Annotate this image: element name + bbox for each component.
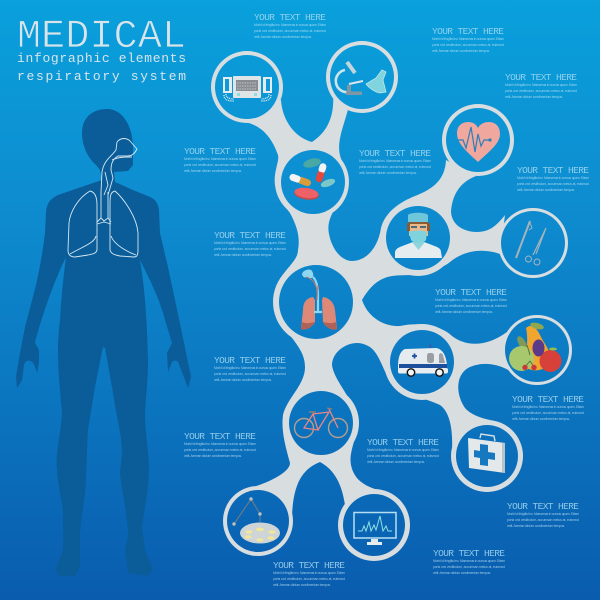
text block 4	[184, 146, 256, 173]
text block 5: velit. Aenean dictum condimentum tempus.	[359, 171, 417, 175]
text block 3: porta orci vestibulum, accumsan metus at, euismod	[505, 89, 577, 93]
lung and airway outlines	[68, 138, 138, 257]
human body silhouette with respiratory system	[16, 109, 191, 576]
text block 9: Morbi id fringilla leo. Maecenas in cursus quam. Etiam	[214, 366, 286, 370]
text block 8: velit. Aenean dictum condimentum tempus.	[435, 310, 493, 314]
text block 10	[512, 394, 584, 421]
text block 9: velit. Aenean dictum condimentum tempus.	[214, 378, 272, 382]
node inner discs	[215, 45, 569, 556]
text block 13	[507, 501, 579, 528]
subtitle: infographic elements: infographic elements	[17, 51, 186, 66]
text block 13: velit. Aenean dictum condimentum tempus.	[507, 524, 565, 528]
heading: MEDICAL: MEDICAL	[17, 15, 186, 60]
text block 8	[435, 287, 507, 314]
text block 11: Morbi id fringilla leo. Maecenas in cursus quam. Etiam	[184, 442, 256, 446]
text block 12	[367, 437, 439, 464]
text block 15: YOUR TEXT HERE	[433, 548, 505, 559]
text block 11: porta orci vestibulum, accumsan metus at, euismod	[184, 448, 256, 452]
text block 15	[433, 548, 505, 575]
text block 11: velit. Aenean dictum condimentum tempus.	[184, 454, 242, 458]
text block 4: velit. Aenean dictum condimentum tempus.	[184, 169, 242, 173]
icon: ambulance	[398, 344, 448, 376]
text block 10: Morbi id fringilla leo. Maecenas in cursus quam. Etiam	[512, 405, 584, 409]
text block 6: YOUR TEXT HERE	[517, 165, 589, 176]
text block 12: velit. Aenean dictum condimentum tempus.	[367, 460, 425, 464]
text block 7: YOUR TEXT HERE	[214, 230, 286, 241]
text block 6	[517, 165, 589, 192]
icon: microscope and flask	[336, 62, 386, 95]
text block 14: velit. Aenean dictum condimentum tempus.	[273, 583, 331, 587]
text block 7: Morbi id fringilla leo. Maecenas in cursus quam. Etiam	[214, 241, 286, 245]
text block 3: YOUR TEXT HERE	[505, 72, 577, 83]
text block 7: velit. Aenean dictum condimentum tempus.	[214, 253, 272, 257]
subtitle: respiratory system: respiratory system	[17, 69, 186, 84]
icon: lungs	[301, 270, 337, 330]
text block 14	[273, 560, 345, 587]
icon: heart with ECG	[457, 122, 500, 162]
icon: first aid kit	[468, 434, 505, 473]
text block 13: porta orci vestibulum, accumsan metus at, euismod	[507, 518, 579, 522]
body silhouette	[16, 109, 191, 576]
text block 1: porta orci vestibulum, accumsan metus at, euismod	[254, 29, 326, 33]
text block 14: Morbi id fringilla leo. Maecenas in cursus quam. Etiam	[273, 571, 345, 575]
text block 3: velit. Aenean dictum condimentum tempus.	[505, 95, 563, 99]
text block 14: porta orci vestibulum, accumsan metus at, euismod	[273, 577, 345, 581]
text block 6: porta orci vestibulum, accumsan metus at, euismod	[517, 182, 589, 186]
connector shape	[240, 93, 512, 517]
text block 6: Morbi id fringilla leo. Maecenas in cursus quam. Etiam	[517, 176, 589, 180]
text block 3	[505, 72, 577, 99]
text block 2: YOUR TEXT HERE	[432, 26, 504, 37]
text block 10: velit. Aenean dictum condimentum tempus.	[512, 417, 570, 421]
text block 9: YOUR TEXT HERE	[214, 355, 286, 366]
text block 15: porta orci vestibulum, accumsan metus at, euismod	[433, 565, 505, 569]
text block 8: YOUR TEXT HERE	[435, 287, 507, 298]
text block 5	[359, 148, 431, 175]
icon: scalpel and forceps	[516, 221, 546, 265]
text block 2: velit. Aenean dictum condimentum tempus.	[432, 49, 490, 53]
text block 6: velit. Aenean dictum condimentum tempus.	[517, 188, 575, 192]
text block 9: porta orci vestibulum, accumsan metus at, euismod	[214, 372, 286, 376]
text block 5: porta orci vestibulum, accumsan metus at, euismod	[359, 165, 431, 169]
text block 1	[254, 12, 326, 39]
text block 3: Morbi id fringilla leo. Maecenas in cursus quam. Etiam	[505, 83, 577, 87]
icon: bicycle	[294, 408, 348, 438]
node rings	[211, 41, 572, 561]
icon: fruit	[509, 321, 562, 372]
icon: doctor	[395, 213, 442, 258]
text block 2	[432, 26, 504, 53]
text block 14: YOUR TEXT HERE	[273, 560, 345, 571]
text block 1: Morbi id fringilla leo. Maecenas in cursus quam. Etiam	[254, 23, 326, 27]
text block 1: velit. Aenean dictum condimentum tempus.	[254, 35, 312, 39]
text block 11	[184, 431, 256, 458]
text block 2: Morbi id fringilla leo. Maecenas in cursus quam. Etiam	[432, 37, 504, 41]
text block 13: Morbi id fringilla leo. Maecenas in cursus quam. Etiam	[507, 512, 579, 516]
text block 15: Morbi id fringilla leo. Maecenas in cursus quam. Etiam	[433, 559, 505, 563]
text block 10: porta orci vestibulum, accumsan metus at, euismod	[512, 411, 584, 415]
icon: surgical lamp	[232, 497, 280, 544]
text block 11: YOUR TEXT HERE	[184, 431, 256, 442]
icon: pills	[288, 157, 336, 201]
text block 4: YOUR TEXT HERE	[184, 146, 256, 157]
icon: defibrillator monitor	[223, 76, 272, 101]
text block 8: Morbi id fringilla leo. Maecenas in cursus quam. Etiam	[435, 298, 507, 302]
text block 12: YOUR TEXT HERE	[367, 437, 439, 448]
text block 1: YOUR TEXT HERE	[254, 12, 326, 23]
text block 10: YOUR TEXT HERE	[512, 394, 584, 405]
text block 7: porta orci vestibulum, accumsan metus at, euismod	[214, 247, 286, 251]
connector network	[211, 41, 572, 561]
text block 2: porta orci vestibulum, accumsan metus at, euismod	[432, 43, 504, 47]
text block 7	[214, 230, 286, 257]
text block 15: velit. Aenean dictum condimentum tempus.	[433, 571, 491, 575]
text block 12: Morbi id fringilla leo. Maecenas in cursus quam. Etiam	[367, 448, 439, 452]
title	[17, 15, 186, 84]
text block 8: porta orci vestibulum, accumsan metus at, euismod	[435, 304, 507, 308]
icon: display monitor	[354, 512, 396, 545]
text block 4: porta orci vestibulum, accumsan metus at, euismod	[184, 163, 256, 167]
text block 5: YOUR TEXT HERE	[359, 148, 431, 159]
text block 13: YOUR TEXT HERE	[507, 501, 579, 512]
text block 9	[214, 355, 286, 382]
text block 4: Morbi id fringilla leo. Maecenas in cursus quam. Etiam	[184, 157, 256, 161]
text block 5: Morbi id fringilla leo. Maecenas in cursus quam. Etiam	[359, 159, 431, 163]
text block 12: porta orci vestibulum, accumsan metus at, euismod	[367, 454, 439, 458]
